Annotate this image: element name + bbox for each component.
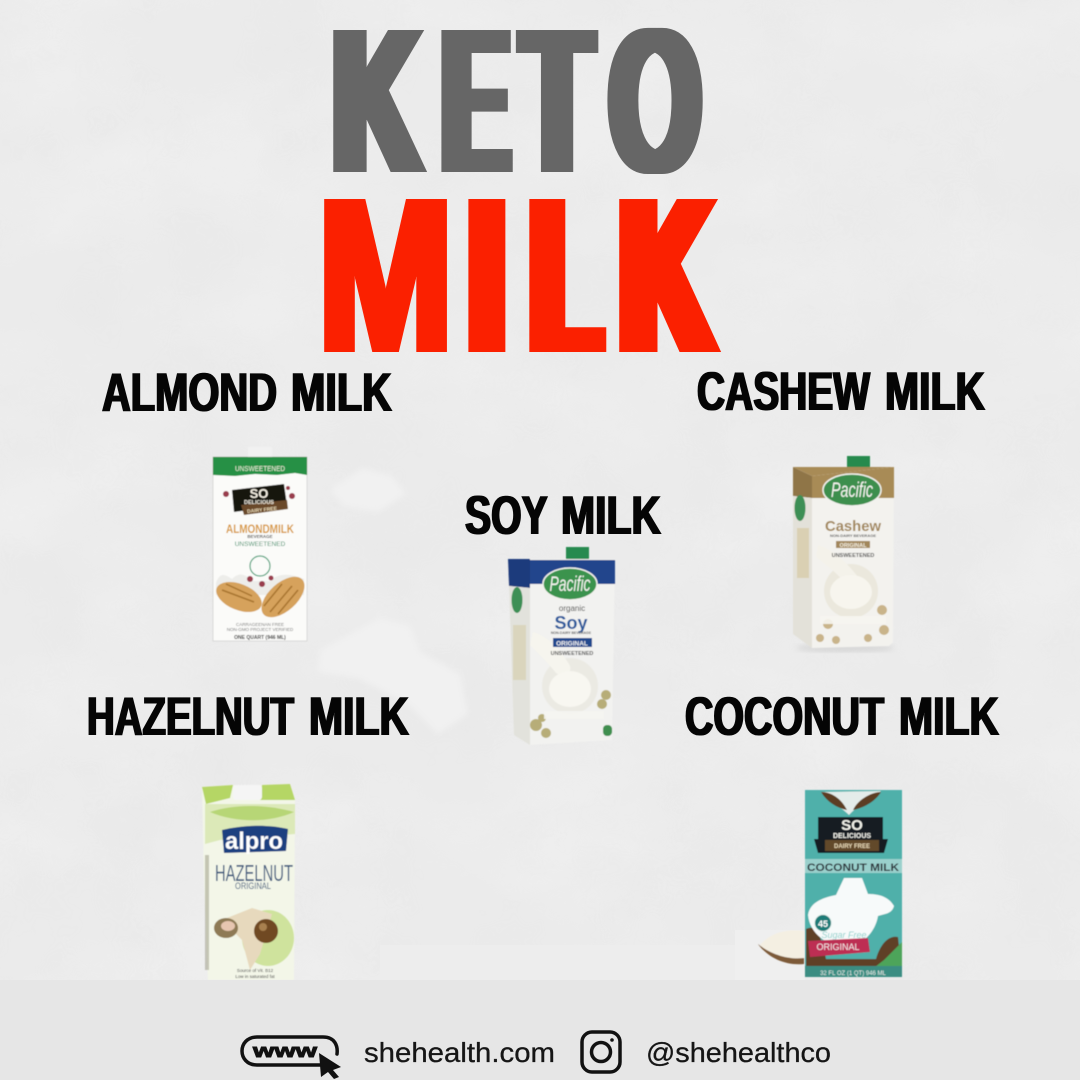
cashew milk carton: ORIGINAL <box>840 543 867 549</box>
hazelnut milk carton: alpro <box>225 828 283 855</box>
coconut milk carton: 45 <box>818 919 828 929</box>
soy milk carton: NON-DAIRY BEVERAGE <box>551 631 592 635</box>
almond milk carton <box>212 447 312 641</box>
soy milk carton: organic <box>559 604 585 613</box>
almond milk carton: ONE QUART (946 ML) <box>234 635 286 641</box>
hazelnut milk carton: ORIGINAL <box>235 881 271 891</box>
almond milk carton: DELICIOUS <box>244 500 274 506</box>
coconut milk carton: DELICIOUS <box>833 833 871 840</box>
almond milk carton: BEVERAGE <box>247 534 273 539</box>
icon: www cursor <box>242 1037 341 1079</box>
heading: coconut milk: COCONUT <box>685 685 884 747</box>
coconut milk carton: COCONUT MILK <box>807 862 899 874</box>
hazelnut milk carton: Low in saturated fat <box>235 974 275 979</box>
coconut milk carton: Sugar Free <box>821 930 867 940</box>
cashew milk carton: UNSWEETENED <box>832 553 874 559</box>
coconut milk carton: 32 FL OZ (1 QT) 946 ML <box>820 971 887 977</box>
title: MILK: L <box>532 152 600 400</box>
title: KETO <box>333 0 703 216</box>
almond milk carton: UNSWEETENED <box>235 541 286 548</box>
hazelnut milk carton <box>202 784 295 980</box>
coconut milk carton <box>758 790 902 977</box>
almond milk carton: NON-GMO PROJECT VERIFIED <box>227 627 294 632</box>
coconut milk carton: SO <box>841 817 863 834</box>
coconut milk carton: DAIRY FREE <box>834 844 870 850</box>
title: MILK: I <box>470 152 503 400</box>
almond milk carton: UNSWEETENED <box>235 464 285 473</box>
almond milk carton: ALMONDMILK <box>226 522 294 536</box>
heading: coconut milk: MILK <box>899 685 999 747</box>
heading: almond milk: ALMOND <box>102 361 277 423</box>
soy milk carton: UNSWEETENED <box>551 651 593 657</box>
footer band <box>0 980 1080 1080</box>
soy milk carton: Soy <box>554 613 588 633</box>
website text: shehealth.com <box>364 1037 555 1068</box>
heading: cashew milk: MILK <box>885 360 985 422</box>
soy milk carton <box>508 547 615 745</box>
soy milk carton: Pacific <box>550 573 591 596</box>
heading: soy milk: MILK <box>561 484 661 546</box>
heading: cashew milk: CASHEW <box>697 360 870 422</box>
almond milk carton: CARRAGEENAN FREE <box>236 622 284 627</box>
cashew milk carton: Pacific <box>831 479 873 502</box>
title: MILK: M <box>318 152 453 400</box>
heading: soy milk: SOY <box>465 484 547 546</box>
almond milk carton: DAIRY FREE <box>247 506 278 515</box>
cashew milk carton: NON-DAIRY BEVERAGE <box>830 533 876 538</box>
heading: almond milk: MILK <box>291 361 392 423</box>
cashew milk carton: Cashew <box>825 518 881 535</box>
heading: hazelnut milk: HAZELNUT <box>87 685 294 747</box>
instagram handle: @shehealthco <box>646 1037 831 1068</box>
soy milk carton: ORIGINAL <box>556 640 588 648</box>
cashew milk carton <box>793 456 895 652</box>
icon: instagram <box>582 1032 620 1072</box>
hazelnut milk carton: HAZELNUT <box>215 860 293 886</box>
almond milk carton: SO <box>250 486 268 501</box>
title: MILK <box>318 152 722 400</box>
heading: hazelnut milk: MILK <box>309 685 409 747</box>
coconut milk carton: ORIGINAL <box>816 942 860 952</box>
title: MILK: K <box>621 152 712 400</box>
icon: www cursor: www <box>251 1041 319 1061</box>
hazelnut milk carton: Source of Vit. B12 <box>237 968 274 973</box>
